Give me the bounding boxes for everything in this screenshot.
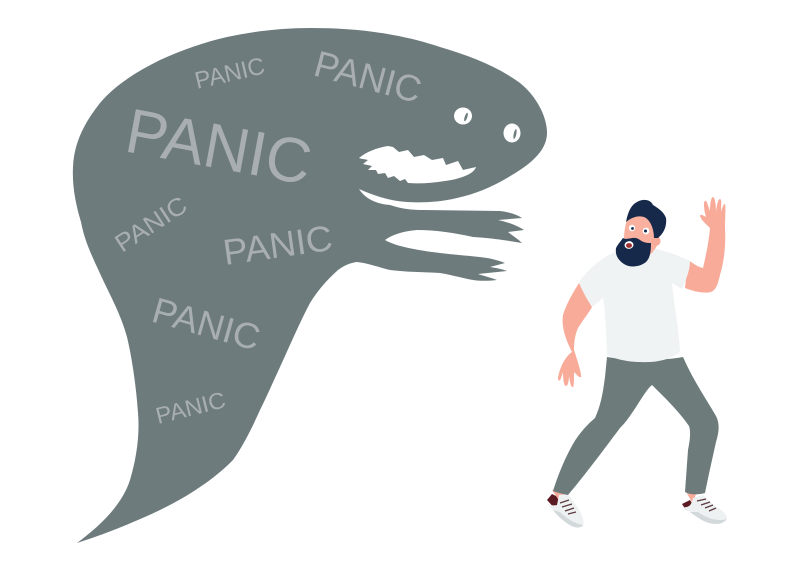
- man trousers: [553, 357, 719, 495]
- word: PANIC top right: PANIC: [310, 43, 426, 111]
- word: PANIC large: PANIC: [120, 96, 317, 199]
- word: PANIC lower: PANIC: [148, 289, 265, 358]
- man face: [624, 215, 659, 253]
- word: PANIC top small: PANIC: [192, 53, 268, 95]
- man right shoe: [682, 490, 727, 524]
- man hair: [626, 200, 666, 238]
- monster shadow: [73, 28, 547, 543]
- man eyes: [629, 225, 649, 234]
- man right arm and raised hand: [685, 197, 725, 293]
- man mouth: [624, 241, 634, 249]
- monster left eye: [454, 108, 472, 124]
- monster body silhouette: [73, 28, 547, 543]
- monster teeth: [359, 146, 476, 183]
- monster right eye: [504, 124, 520, 142]
- word: PANIC bottom: PANIC: [153, 386, 228, 429]
- frightened man: [547, 197, 727, 528]
- man beard: [616, 238, 651, 266]
- man left arm and hand: [558, 283, 592, 387]
- man neck: [640, 243, 653, 262]
- word: PANIC middle: PANIC: [220, 217, 335, 273]
- man ear: [652, 236, 660, 246]
- man t-shirt: [579, 248, 690, 362]
- word: PANIC left: PANIC: [110, 191, 192, 258]
- man left shoe: [547, 490, 584, 528]
